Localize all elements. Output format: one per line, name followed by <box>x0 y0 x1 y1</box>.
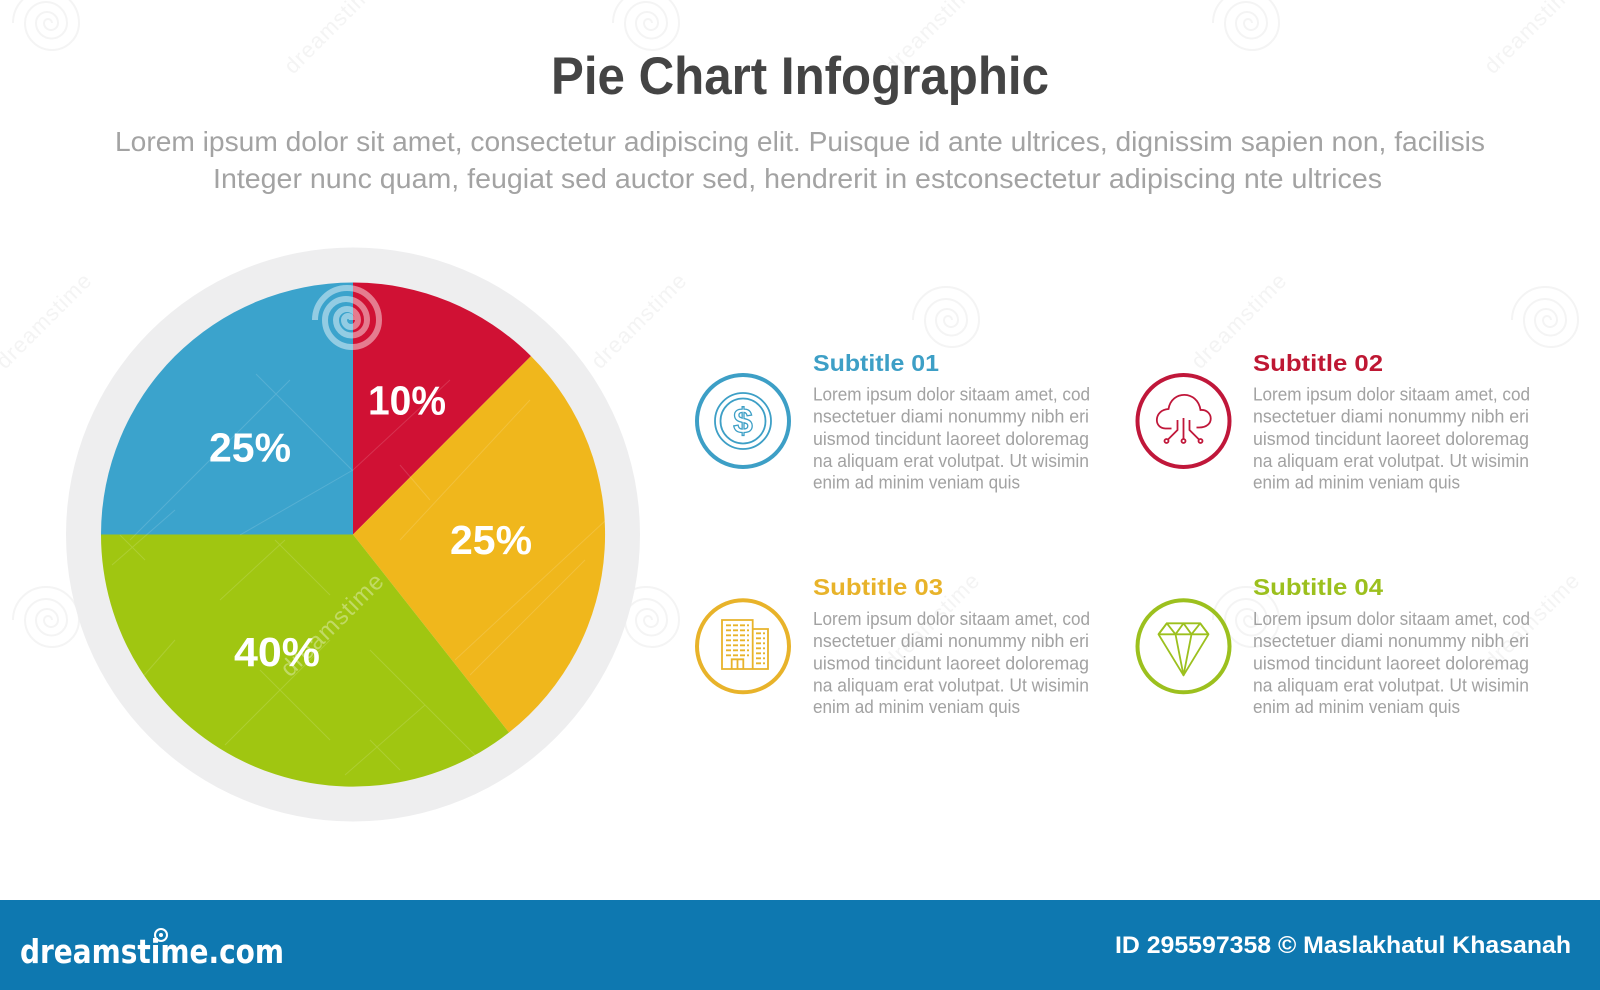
footer logo: dreamstime.com <box>20 932 284 971</box>
body text: uismod tincidunt laoreet doloremag <box>1253 653 1529 673</box>
label orange 25%: 25% <box>450 517 532 563</box>
body text: uismod tincidunt laoreet doloremag <box>813 653 1089 673</box>
body text: Lorem ipsum dolor sitaam amet, cod <box>813 385 1090 405</box>
heading: Subtitle 04 <box>1253 574 1383 600</box>
icon: cloud network <box>1138 375 1230 467</box>
body text: uismod tincidunt laoreet doloremag <box>813 429 1089 449</box>
body text: na aliquam erat volutpat. Ut wisimin <box>813 675 1089 695</box>
text: dreamstime <box>1186 268 1292 374</box>
body text: enim ad minim veniam quis <box>813 697 1020 717</box>
body text <box>1253 385 1530 493</box>
heading: Subtitle 01 <box>813 350 939 376</box>
body text: na aliquam erat volutpat. Ut wisimin <box>813 451 1089 471</box>
body text: nsectetuer diami nonummy nibh eri <box>1253 407 1529 427</box>
footer credit: ID 295597358 © Maslakhatul Khasanah <box>1115 932 1571 959</box>
panel: subtitle 01 <box>697 350 1090 493</box>
body text: nsectetuer diami nonummy nibh eri <box>813 407 1089 427</box>
text: dreamstime <box>1479 568 1585 674</box>
intro text block <box>115 126 1485 194</box>
icon: buildings <box>697 600 789 692</box>
text: dreamstime <box>586 268 692 374</box>
pie background ring <box>66 248 640 822</box>
icon: coin <box>697 375 789 467</box>
heading: Subtitle 02 <box>1253 350 1383 376</box>
body text: uismod tincidunt laoreet doloremag <box>1253 429 1529 449</box>
label 40%: 40% <box>234 629 320 675</box>
label blue 25%: 25% <box>209 424 291 470</box>
pie chart: dreamstime <box>275 567 390 682</box>
label 10%: 10% <box>368 378 446 424</box>
body text: Lorem ipsum dolor sitaam amet, cod <box>1253 609 1530 629</box>
body text <box>813 609 1090 717</box>
heading: Subtitle 03 <box>813 574 943 600</box>
slice: orange 25% <box>353 356 605 732</box>
slice: red 10% <box>353 282 531 534</box>
body text <box>813 385 1090 493</box>
body text: nsectetuer diami nonummy nibh eri <box>813 631 1089 651</box>
icon: diamond <box>1138 600 1230 692</box>
pie chart <box>66 248 640 822</box>
title: Pie Chart Infographic <box>551 47 1049 106</box>
body text: Lorem ipsum dolor sitaam amet, cod <box>1253 385 1530 405</box>
panel: subtitle 02 <box>1138 350 1530 493</box>
body text: enim ad minim veniam quis <box>1253 697 1460 717</box>
panel: subtitle 04 <box>1138 574 1530 717</box>
body text <box>1253 609 1530 717</box>
intro text block: Lorem ipsum dolor sit amet, consectetur adipiscing elit. Puisque id ante ultrices, dignissim sapien non, facilisis <box>115 126 1485 157</box>
intro text block: Integer nunc quam, feugiat sed auctor sed, hendrerit in estconsectetur adipiscing nte ultrices <box>213 163 1382 194</box>
body text: enim ad minim veniam quis <box>813 473 1020 493</box>
slice: green 40% <box>101 534 509 787</box>
text: dreamstime <box>879 568 985 674</box>
footer band <box>0 900 1600 990</box>
icon: coin: $ <box>733 402 753 441</box>
body text: enim ad minim veniam quis <box>1253 473 1460 493</box>
slice: blue 25% <box>101 282 353 534</box>
body text: na aliquam erat volutpat. Ut wisimin <box>1253 675 1529 695</box>
body text: Lorem ipsum dolor sitaam amet, cod <box>813 609 1090 629</box>
panel: subtitle 03 <box>697 574 1090 717</box>
body text: na aliquam erat volutpat. Ut wisimin <box>1253 451 1529 471</box>
body text: nsectetuer diami nonummy nibh eri <box>1253 631 1529 651</box>
